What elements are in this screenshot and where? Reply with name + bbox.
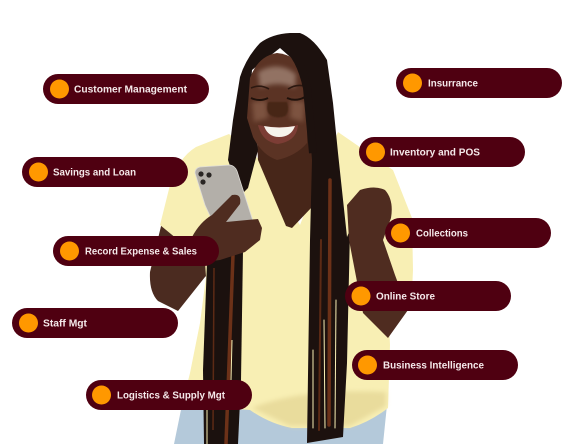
- pill: Inventory and POS: Inventory and POS: [390, 148, 480, 158]
- pill: Staff Mgt: [12, 308, 178, 338]
- pill: Savings and Loan: [22, 157, 188, 187]
- jeans: [174, 405, 387, 444]
- pill: Collections: Collections: [416, 228, 468, 240]
- cheeks: [252, 100, 305, 122]
- pill: Customer Management: Customer Management: [74, 84, 188, 96]
- forehead highlight: [258, 66, 296, 88]
- pill: Record Expense & Sales: Record Expense & Sales: [85, 246, 197, 258]
- illustration: smiling woman holding a phone: [150, 33, 413, 444]
- open smile: [258, 125, 298, 144]
- closed eyes: [251, 97, 305, 100]
- pill: Online Store: [345, 281, 511, 311]
- shirt hem shading: [252, 391, 386, 426]
- phone cameras: [198, 171, 212, 185]
- eyebrows: [251, 85, 304, 89]
- teeth: [264, 126, 295, 137]
- face: [247, 53, 307, 160]
- pill: Business Intelligence: [352, 350, 518, 380]
- hair mass behind head: [228, 33, 350, 443]
- pill: Inventory and POS: [359, 137, 525, 167]
- long braids, left side: [203, 250, 243, 444]
- t-shirt: [160, 132, 413, 428]
- pill: Insurrance: [396, 68, 562, 98]
- pill: Savings and Loan: Savings and Loan: [53, 168, 136, 178]
- hand holding phone: [192, 195, 262, 262]
- pill: Logistics & Supply Mgt: Logistics & Supply Mgt: [117, 390, 226, 402]
- pill: Logistics & Supply Mgt: [86, 380, 252, 410]
- pill: Insurrance: Insurrance: [428, 78, 478, 90]
- pill: Collections: [385, 218, 551, 248]
- braid texture, left side: [207, 255, 233, 444]
- pill: Staff Mgt: Staff Mgt: [43, 318, 88, 330]
- part braid over forehead: [283, 44, 313, 153]
- left arm: [150, 222, 228, 311]
- smartphone: [195, 165, 258, 242]
- neck and chest: [256, 125, 318, 228]
- pill: Online Store: Online Store: [376, 292, 435, 302]
- pill: Record Expense & Sales: [53, 236, 219, 266]
- braid texture, right side: [313, 180, 336, 430]
- pill: Business Intelligence: Business Intelligence: [383, 360, 484, 372]
- raised fist and forearm: [347, 188, 408, 338]
- nose: [267, 102, 288, 118]
- pill: Customer Management: [43, 74, 209, 104]
